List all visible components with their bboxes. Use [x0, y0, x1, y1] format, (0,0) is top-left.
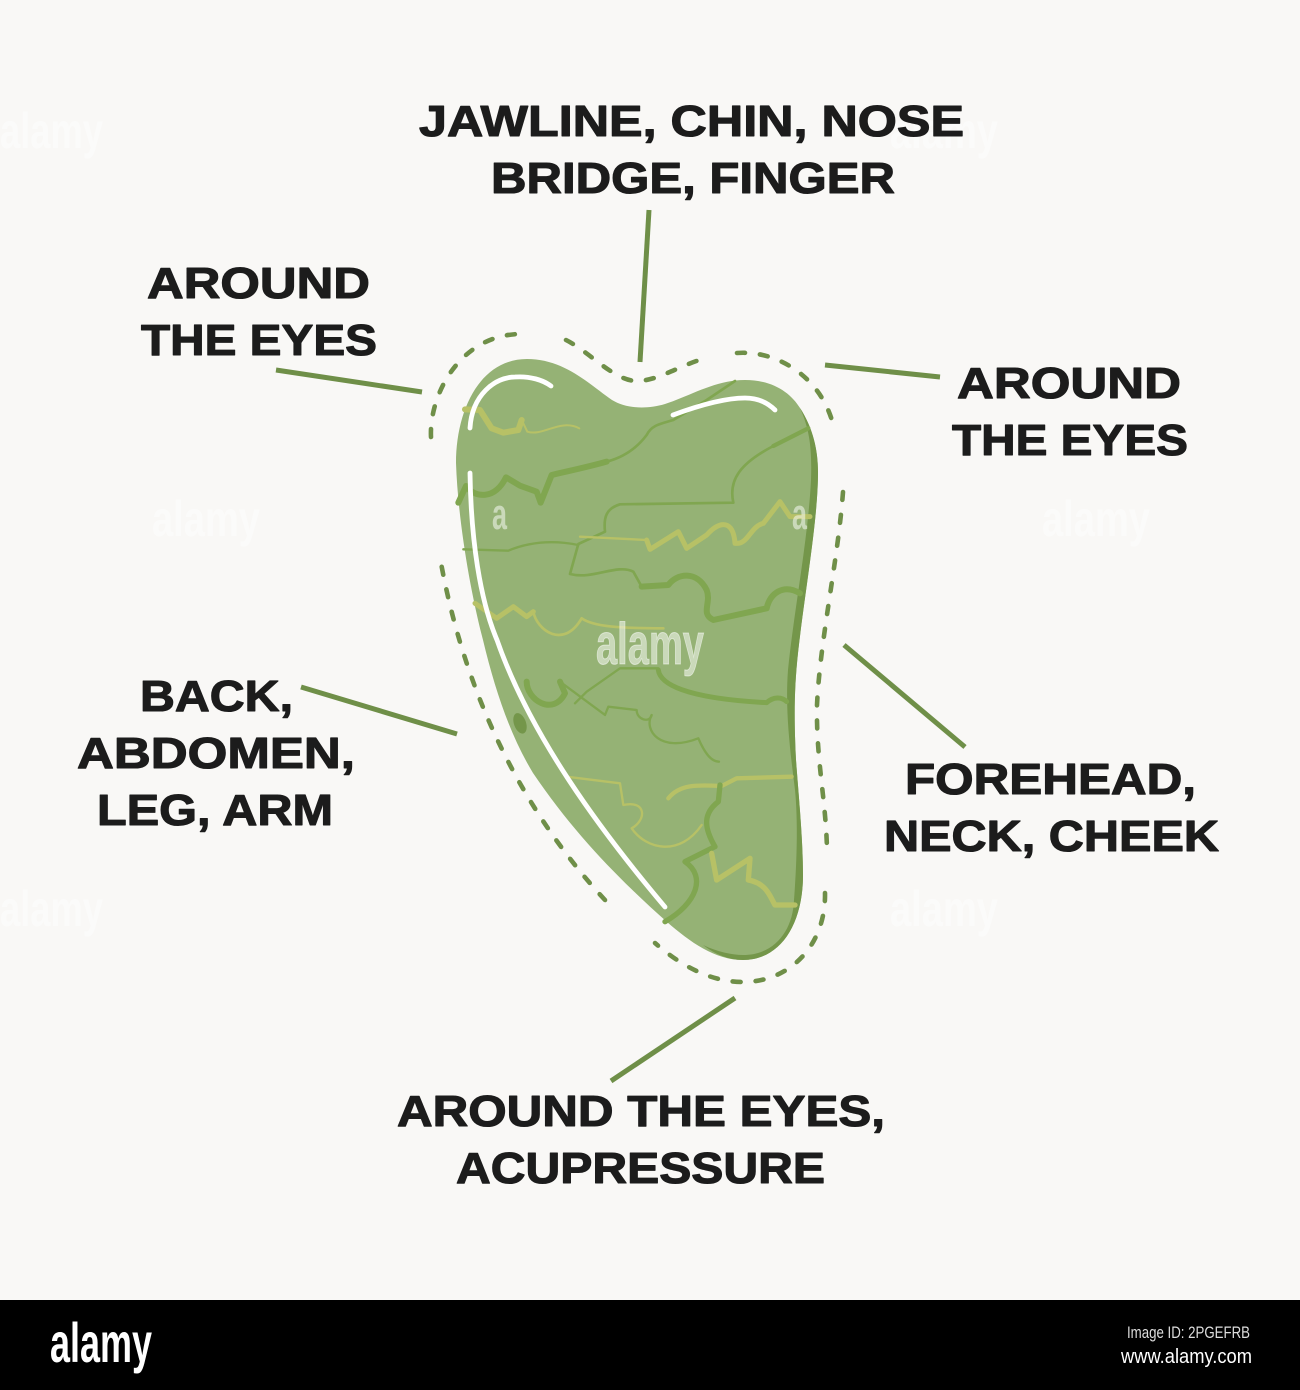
leader: bottom [611, 998, 735, 1081]
background watermarks: alamy [0, 881, 103, 937]
label: back, abdomen, leg, arm: ABDOMEN, [77, 729, 355, 778]
centre watermark: alamy [596, 612, 704, 677]
label: forehead, neck, cheek: NECK, CHEEK [884, 812, 1219, 861]
label: around the eyes left: AROUND [147, 259, 370, 308]
label: around the eyes, acupressure: ACUPRESSURE [456, 1144, 825, 1193]
label: around the eyes, acupressure: AROUND THE EYES, [397, 1087, 885, 1136]
stone small watermarks: a [492, 490, 507, 539]
label: back, abdomen, leg, arm [77, 672, 355, 835]
label: around the eyes left: THE EYES [141, 316, 377, 365]
stone veins lower [511, 668, 795, 922]
leader: left [301, 687, 457, 734]
background watermarks: alamy [1042, 491, 1150, 547]
label: forehead, neck, cheek: FOREHEAD, [905, 755, 1196, 804]
stone body [456, 359, 818, 960]
footer url: www.alamy.com [1120, 1346, 1252, 1368]
stone small watermarks: a [792, 490, 807, 539]
background watermarks: alamy [890, 103, 998, 159]
background watermarks [0, 103, 1150, 937]
label: around the eyes right: THE EYES [952, 416, 1188, 465]
footer image id: Image ID: 2PGEFRB [1127, 1323, 1250, 1342]
leader: top right [825, 365, 940, 377]
label: back, abdomen, leg, arm: LEG, ARM [97, 786, 333, 835]
leader lines [276, 210, 965, 1081]
footer logo: alamy [50, 1311, 152, 1374]
label: around the eyes left [141, 259, 377, 365]
label: back, abdomen, leg, arm: BACK, [140, 672, 293, 721]
footer bar [0, 1300, 1300, 1390]
leader: right [844, 645, 965, 747]
background watermarks: alamy [0, 103, 103, 159]
stone veins upper [458, 381, 810, 635]
label: jawline, chin, nose bridge, finger [419, 97, 964, 203]
label: around the eyes right [952, 359, 1188, 465]
leader: top left [276, 370, 422, 392]
stone shaded right edge [703, 408, 818, 960]
background watermarks: alamy [890, 881, 998, 937]
label: around the eyes, acupressure [397, 1087, 885, 1193]
stone small watermarks [492, 490, 807, 539]
label: jawline, chin, nose bridge, finger: BRIDGE, FINGER [491, 154, 895, 203]
label: forehead, neck, cheek [884, 755, 1219, 861]
label: jawline, chin, nose bridge, finger: JAWLINE, CHIN, NOSE [419, 97, 964, 146]
leader: top [640, 210, 649, 362]
gua sha stone [456, 359, 818, 960]
dashed outline around stone [431, 334, 843, 982]
stone highlights [470, 377, 775, 907]
background watermarks: alamy [152, 491, 260, 547]
label: around the eyes right: AROUND [957, 359, 1181, 408]
